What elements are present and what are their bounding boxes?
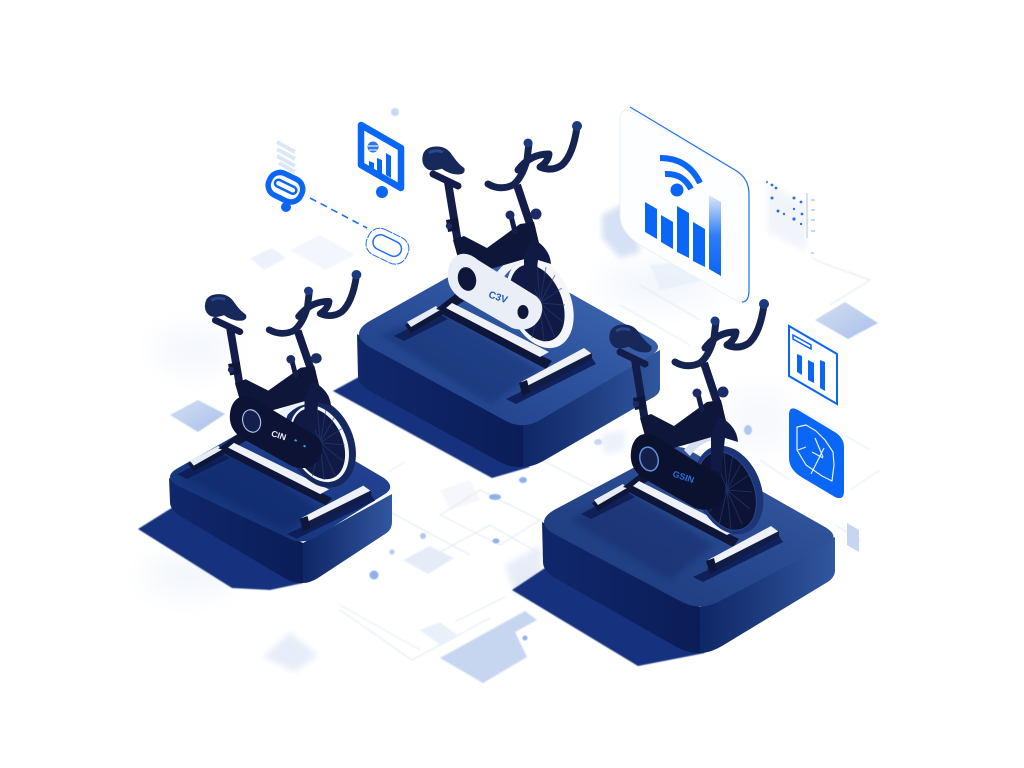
floor patch: right tile <box>815 302 878 339</box>
platform shadow <box>512 566 705 666</box>
icon: outlined pill node <box>362 224 413 268</box>
platform top <box>544 447 834 606</box>
background: faint isometric floor plan <box>145 108 880 672</box>
chain guard <box>448 254 542 330</box>
logo text: GSIN <box>671 469 695 485</box>
bike: left with black chain guard <box>177 270 375 539</box>
icon: wifi <box>660 158 700 196</box>
panel: left platform <box>138 416 392 590</box>
icon: blue badge <box>789 408 844 498</box>
logo text: CIN <box>270 428 288 442</box>
chain guard <box>230 396 322 468</box>
bike: right with dark chain guard <box>581 299 783 582</box>
floor patch: left tile <box>170 400 225 432</box>
floor patch: small side tile <box>847 523 859 552</box>
icon: report screen with bars <box>361 125 401 198</box>
platform sides <box>169 478 303 583</box>
icon: chat bubble <box>264 142 306 212</box>
platform shadow <box>333 372 530 478</box>
platform sides <box>542 522 700 653</box>
floor patch: lower tile <box>440 611 537 683</box>
panel: right platform <box>512 447 835 666</box>
card: signal and wifi chart <box>620 107 749 302</box>
platform sides <box>357 334 523 467</box>
panel: data dots <box>766 181 815 253</box>
bike: middle with white chain guard <box>394 121 596 404</box>
arrow: dashed connector <box>310 198 367 228</box>
icon: chart window <box>789 326 837 404</box>
platform top <box>359 254 658 425</box>
platform top <box>170 416 390 542</box>
panel: middle platform <box>333 254 660 478</box>
chain guard <box>631 434 725 510</box>
platform shadow <box>138 504 303 590</box>
logo text: C3V <box>487 290 509 306</box>
bar chart <box>645 195 721 276</box>
